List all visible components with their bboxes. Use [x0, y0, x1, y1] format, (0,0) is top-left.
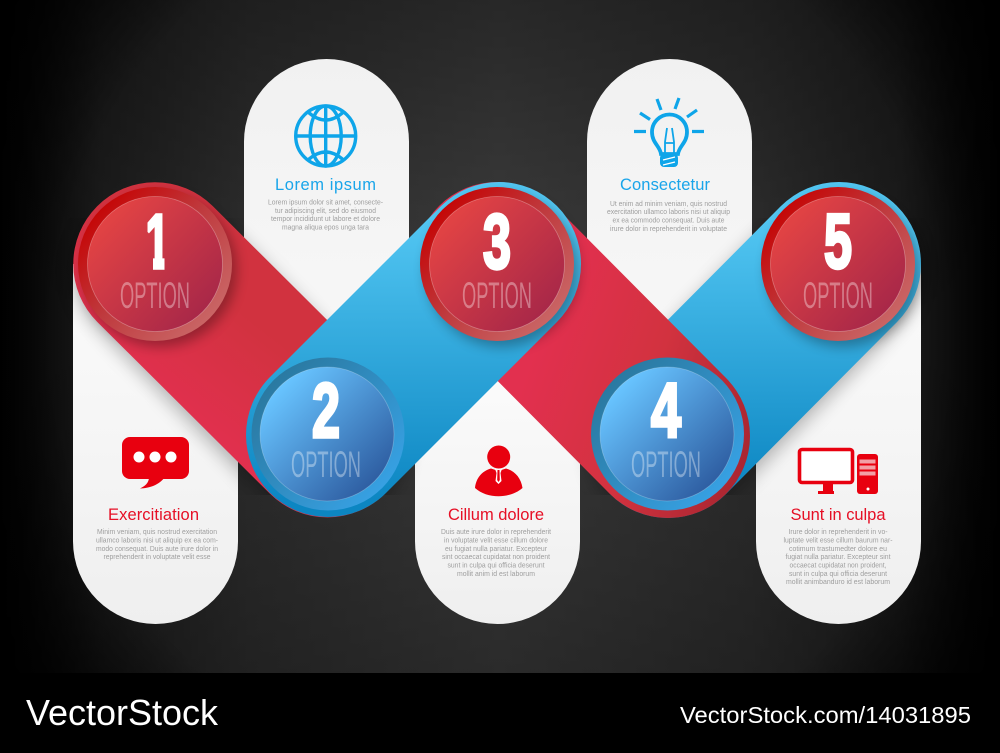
panel: pill 1 background	[73, 264, 238, 624]
icon: globe	[296, 106, 356, 166]
circle 4	[591, 358, 744, 510]
circle 4: OPTION	[631, 444, 701, 485]
text block: Cillum dolore body: in voluptate velit esse cillum dolore	[444, 538, 548, 544]
footer bar: VectorStock.com/14031895	[680, 702, 971, 728]
text block: Exercitiation body: ullamco laboris nisi ut aliquip ex ea com-	[96, 538, 219, 544]
heading: Consectetur: Consectetur	[620, 176, 710, 194]
text block: Cillum dolore body: sunt in culpa qui officia deserunt	[448, 562, 545, 570]
icon: computer	[800, 450, 878, 494]
text block: Sunt in culpa body: luptate velit esse cillum baurum nar-	[784, 538, 893, 544]
circle 1: OPTION	[120, 275, 190, 316]
text block: Exercitiation body: modo consequat. Duis aute irure dolor in	[96, 546, 218, 553]
text block: Consectetur body: ex ea commodo consequat. Duis aute	[612, 218, 725, 224]
text block: Lorem ipsum body: magna aliqua epos unga tara	[282, 224, 369, 232]
text block: Sunt in culpa body	[784, 529, 893, 586]
panel: pill 3 background	[415, 370, 580, 624]
blue band 2 to 3	[328, 264, 499, 435]
red band 1 to 2	[155, 264, 327, 436]
icon: speech bubble	[122, 437, 189, 488]
text block: Sunt in culpa body: fugiat nulla pariatur. Excepteur sint	[786, 554, 891, 561]
circle 1	[78, 187, 237, 347]
text block: Sunt in culpa body: occaecat cupidatat non proident,	[790, 562, 887, 570]
text block: Cillum dolore body: Duis aute irure dolor in reprehenderit	[441, 529, 551, 536]
panel: pill 2 background	[244, 59, 409, 330]
text block: Exercitiation body: reprehenderit in voluptate velit esse	[104, 554, 211, 561]
text block: Sunt in culpa body: Irure dolor in reprehenderit in vo-	[788, 529, 888, 536]
text block: Lorem ipsum body: Lorem ipsum dolor sit amet, consecte-	[268, 200, 384, 206]
text block: Consectetur body: Ut enim ad minim veniam, quis nostrud	[610, 201, 727, 208]
band shadows	[155, 270, 839, 443]
icon: light bulb	[634, 98, 704, 167]
text block: Consectetur body: irure dolor in reprehenderit in voluptate	[610, 226, 727, 233]
text block: Sunt in culpa body: sunt in culpa qui officia deserunt	[789, 571, 887, 578]
footer bar: VectorStock	[26, 692, 219, 733]
panel: pill 5 background	[756, 264, 921, 624]
red band 3 to 4	[497, 264, 668, 436]
icon: person	[475, 446, 522, 496]
circle 2: 2	[312, 368, 340, 454]
heading: Lorem ipsum: Lorem ipsum	[275, 176, 376, 194]
circle 2	[252, 358, 404, 510]
footer bar	[0, 673, 1000, 753]
text block: Consectetur body	[607, 201, 730, 233]
circle 1: 1	[146, 199, 170, 285]
text block: Lorem ipsum body	[268, 200, 384, 232]
text block: Lorem ipsum body: tur adipiscing elit, sed do eiusmod	[275, 208, 376, 215]
heading: Cillum dolore: Cillum dolore	[448, 506, 544, 524]
panel: pill 4 background	[587, 59, 752, 330]
circle 5: 5	[824, 199, 852, 285]
text block: Exercitiation body: Minim veniam, quis nostrud exercitation	[97, 529, 217, 536]
circle 5: OPTION	[803, 275, 873, 316]
text block: Sunt in culpa body: cotimum trastumedter dolore eu	[789, 546, 887, 553]
text block: Lorem ipsum body: tempor incididunt ut labore et dolore	[271, 216, 380, 223]
heading: Sunt in culpa: Sunt in culpa	[790, 506, 886, 524]
circle 2: OPTION	[291, 444, 361, 485]
text block: Cillum dolore body: mollit anim id est laborum	[457, 571, 535, 578]
text block: Cillum dolore body: eu fugiat nulla pariatur. Excepteur	[445, 546, 548, 553]
circle 4: 4	[651, 368, 681, 454]
text block: Cillum dolore body	[441, 529, 551, 578]
text block: Consectetur body: exercitation ullamco laboris nisi ut aliquip	[607, 209, 730, 216]
heading: Exercitiation: Exercitiation	[108, 506, 199, 524]
text block: Exercitiation body	[96, 529, 219, 561]
blue band 4 to 5	[668, 264, 839, 436]
circle 3: 3	[483, 199, 511, 285]
text block: Sunt in culpa body: mollit animbanduro id est laborum	[786, 579, 890, 586]
circle 3	[420, 187, 579, 347]
circle 3: OPTION	[462, 275, 532, 316]
text block: Cillum dolore body: sint occaecat cupidatat non proident	[442, 554, 550, 561]
circle 5	[761, 187, 920, 347]
